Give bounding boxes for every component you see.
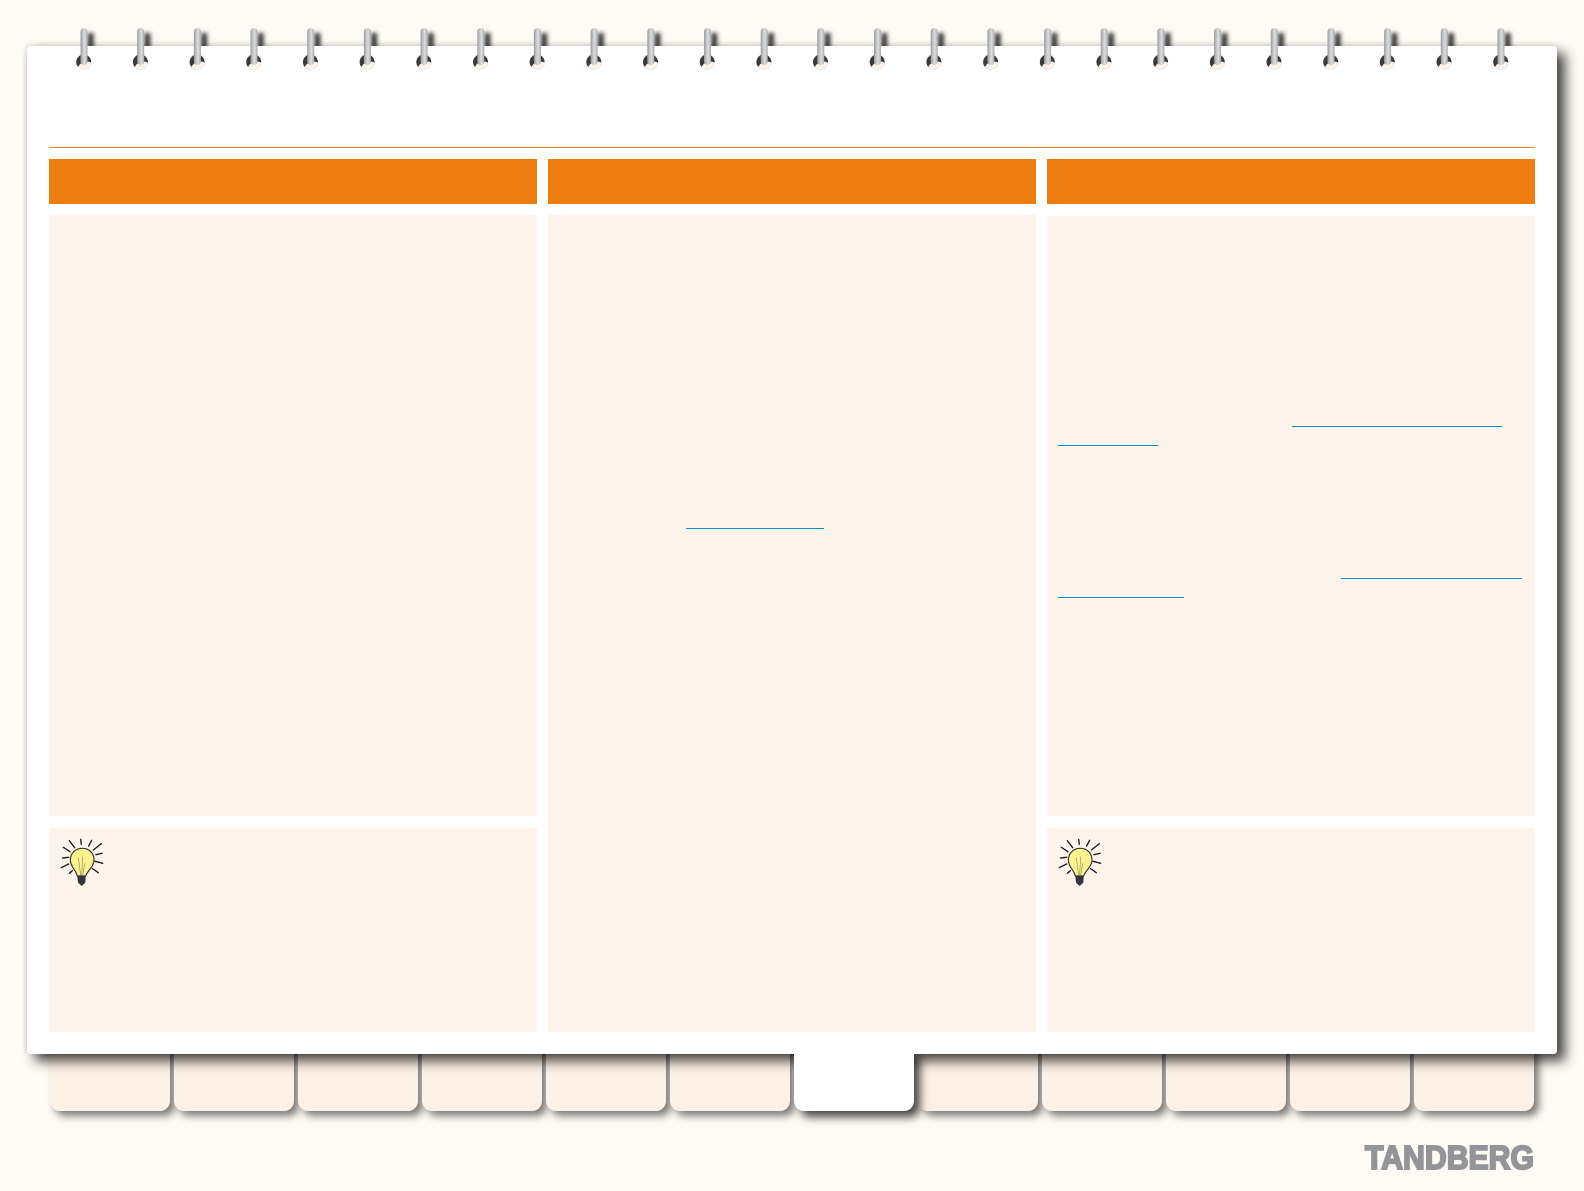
tab 3	[298, 1030, 418, 1111]
TANDBERG logo: TANDBERG	[1365, 1139, 1534, 1176]
tab 6	[670, 1030, 790, 1111]
tab 12	[1414, 1030, 1534, 1111]
title rule	[49, 147, 1535, 148]
link underline: column 2	[686, 528, 824, 529]
tab 2	[174, 1030, 294, 1111]
column 3 heading bar	[1047, 159, 1535, 204]
tab 1	[50, 1030, 170, 1111]
panel: column 3 body	[1047, 216, 1535, 816]
ring shadows	[88, 30, 1514, 46]
link underline: column 3 second line	[1341, 578, 1522, 579]
panel: column 1 body	[49, 215, 537, 816]
panel: column 2 body	[548, 215, 1036, 1032]
tab 11	[1290, 1030, 1410, 1111]
link underline: column 3 first wrap	[1058, 445, 1158, 446]
column 2 heading bar	[548, 159, 1036, 204]
tab 10	[1166, 1030, 1286, 1111]
spiral rings	[76, 28, 1508, 70]
panel: column 3 tip	[1047, 828, 1535, 1032]
active tab	[794, 1050, 914, 1111]
icon: light bulb left	[60, 838, 104, 886]
tab 5	[546, 1030, 666, 1111]
link underline: column 3 first line	[1292, 426, 1502, 427]
tab 9	[1042, 1030, 1162, 1111]
column 1 heading bar	[49, 159, 537, 204]
link underline: column 3 second wrap	[1058, 597, 1184, 598]
icon: light bulb right	[1058, 838, 1102, 886]
tab 4	[422, 1030, 542, 1111]
tab 8	[918, 1030, 1038, 1111]
panel: column 1 tip	[49, 828, 537, 1032]
